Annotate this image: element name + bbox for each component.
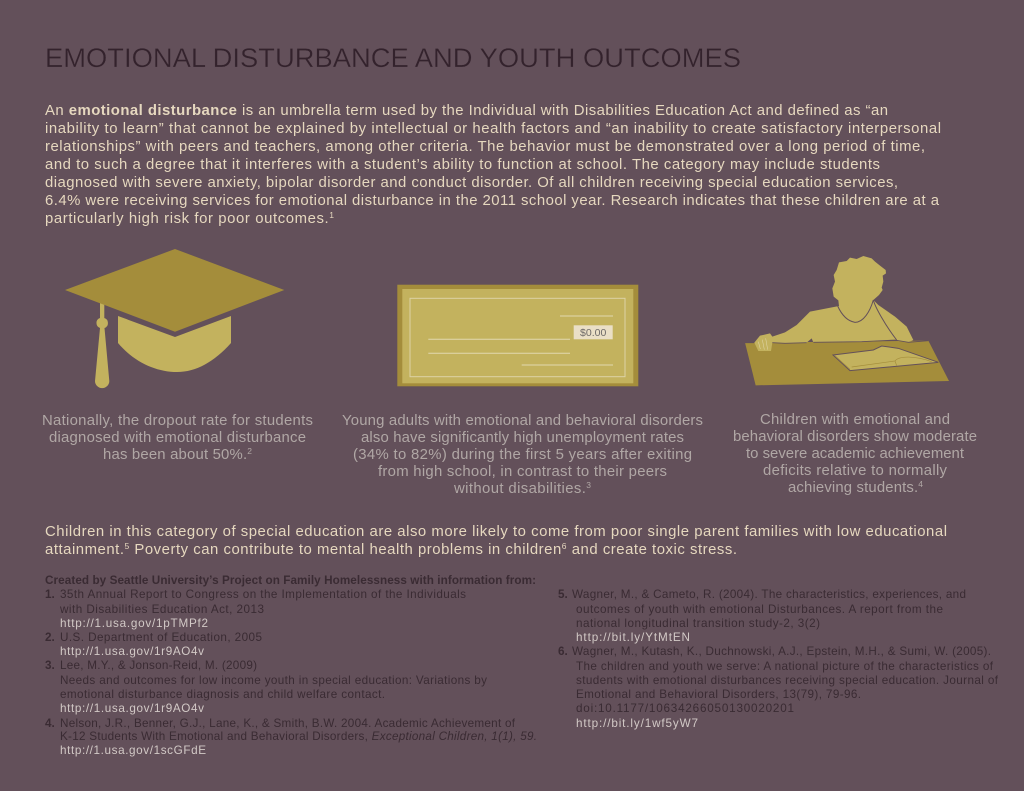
references: right column: students with emotional disturbances receiving special education. Journal of [576,674,999,687]
references: left column: Lee, M.Y., & Jonson-Reid, M. (2009) [60,659,257,672]
references: left column: 1. [45,588,55,601]
references: right column: Wagner, M., & Cameto, R. (2004). The characteristics, experiences, and [572,588,966,601]
references: right column: 6. [558,645,568,658]
references: left column: 2. [45,631,55,644]
text block: poverty note: 6 [562,541,567,551]
references: left column: 35th Annual Report to Congress on the Implementation of the Individuals [60,588,466,601]
caption: academic achievement: behavioral disorders show moderate [733,429,977,445]
icon: graduation cap [65,249,284,388]
references: left column: http://1.usa.gov/1pTMPf2 [60,617,208,630]
text block: poverty note [45,524,947,558]
caption: academic achievement: to severe academic achievement [746,446,965,462]
caption: academic achievement: achieving students. [788,480,918,496]
references: left column [45,574,537,757]
references: right column: national longitudinal transition study-2, 3(2) [576,617,820,630]
references: right column: 5. [558,588,568,601]
caption: dropout rate: diagnosed with emotional disturbance [49,430,306,446]
caption: unemployment: from high school, in contrast to their peers [378,464,667,480]
caption: unemployment: without disabilities. [454,481,586,497]
references: left column: K-12 Students With Emotional and Behavioral Disorders, Exceptional Children, 1(1), 59. [60,730,537,743]
caption: academic achievement: deficits relative to normally [763,463,948,479]
references: right column: http://bit.ly/1wf5yW7 [576,717,698,730]
icon: blank check [397,285,638,386]
text block: introduction: 6.4% were receiving services for emotional disturbance in the 2011 school year. Research indicates that these children are at a [45,193,940,209]
text block: introduction [45,103,941,227]
references: right column: http://bit.ly/YtMtEN [576,631,690,644]
references: left column: http://1.usa.gov/1scGFdE [60,744,206,757]
text block: poverty note: Children in this category of special education are also more likely to come from poor single parent families with low educational [45,524,947,540]
references: right column: outcomes of youth with emotional Disturbances. A report from the [576,603,943,616]
caption: academic achievement [733,412,977,496]
text block: poverty note: and create toxic stress. [567,542,737,558]
text block: poverty note: Poverty can contribute to mental health problems in children [130,542,561,558]
references: left column: http://1.usa.gov/1r9AO4v [60,645,204,658]
caption: dropout rate: 2 [247,446,252,456]
caption: dropout rate: has been about 50%. [103,447,247,463]
caption: unemployment: 3 [586,480,591,490]
references: right column: Wagner, M., Kutash, K., Duchnowski, A.J., Epstein, M.H., & Sumi, W. (2005). [572,645,991,658]
references: left column: emotional disturbance diagnosis and child welfare contact. [60,688,385,701]
text block: introduction: and to such a degree that it interferes with a student’s ability to function at school. The category may include students [45,157,880,173]
text block: introduction: inability to learn” that cannot be explained by intellectual or health factors and “an inability to create satisfactory interpersonal [45,121,941,137]
caption: unemployment: Young adults with emotional and behavioral disorders [342,413,703,429]
references: left column: U.S. Department of Education, 2005 [60,631,262,644]
title: EMOTIONAL DISTURBANCE AND YOUTH OUTCOMES [45,43,741,73]
caption: unemployment [342,413,703,497]
references: right column: doi:10.1177/10634266050130020201 [576,702,794,715]
icon: child reading at a desk [745,256,949,385]
icon: blank check: $0.00 [580,327,606,339]
text block: introduction: relationships” with peers and teachers, among other criteria. The behavior must be demonstrated over a long period of time, [45,139,925,155]
references: right column: The children and youth we serve: A national picture of the characteristics of [576,660,994,673]
text block: poverty note: 5 [124,541,129,551]
references: left column: Needs and outcomes for low income youth in special education: Variations by [60,674,487,687]
references: left column: 4. [45,717,55,730]
caption: dropout rate: Nationally, the dropout rate for students [42,413,313,429]
references: left column: http://1.usa.gov/1r9AO4v [60,702,204,715]
caption: academic achievement: Children with emotional and [760,412,950,428]
caption: unemployment: (34% to 82%) during the first 5 years after exiting [353,447,692,463]
text block: introduction: An emotional disturbance is an umbrella term used by the Individual with Disabilities Education Act and defined as “an [45,103,888,119]
references: left column: Nelson, J.R., Benner, G.J., Lane, K., & Smith, B.W. 2004. Academic Achievement of [60,717,516,730]
caption: dropout rate [42,413,313,463]
caption: unemployment: also have significantly high unemployment rates [361,430,684,446]
references: left column: Created by Seattle University’s Project on Family Homelessness with information from: [45,574,536,587]
references: left column: 3. [45,659,55,672]
text block: introduction: diagnosed with severe anxiety, bipolar disorder and conduct disorder. Of all children receiving special education services, [45,175,898,191]
text block: poverty note: attainment. [45,542,124,558]
references: right column [558,588,999,730]
caption: academic achievement: 4 [918,479,923,489]
text block: introduction: 1 [329,210,334,220]
references: left column: with Disabilities Education Act, 2013 [59,603,264,616]
text block: introduction: particularly high risk for poor outcomes. [45,211,329,227]
references: right column: Emotional and Behavioral Disorders, 13(79), 79-96. [576,688,861,701]
